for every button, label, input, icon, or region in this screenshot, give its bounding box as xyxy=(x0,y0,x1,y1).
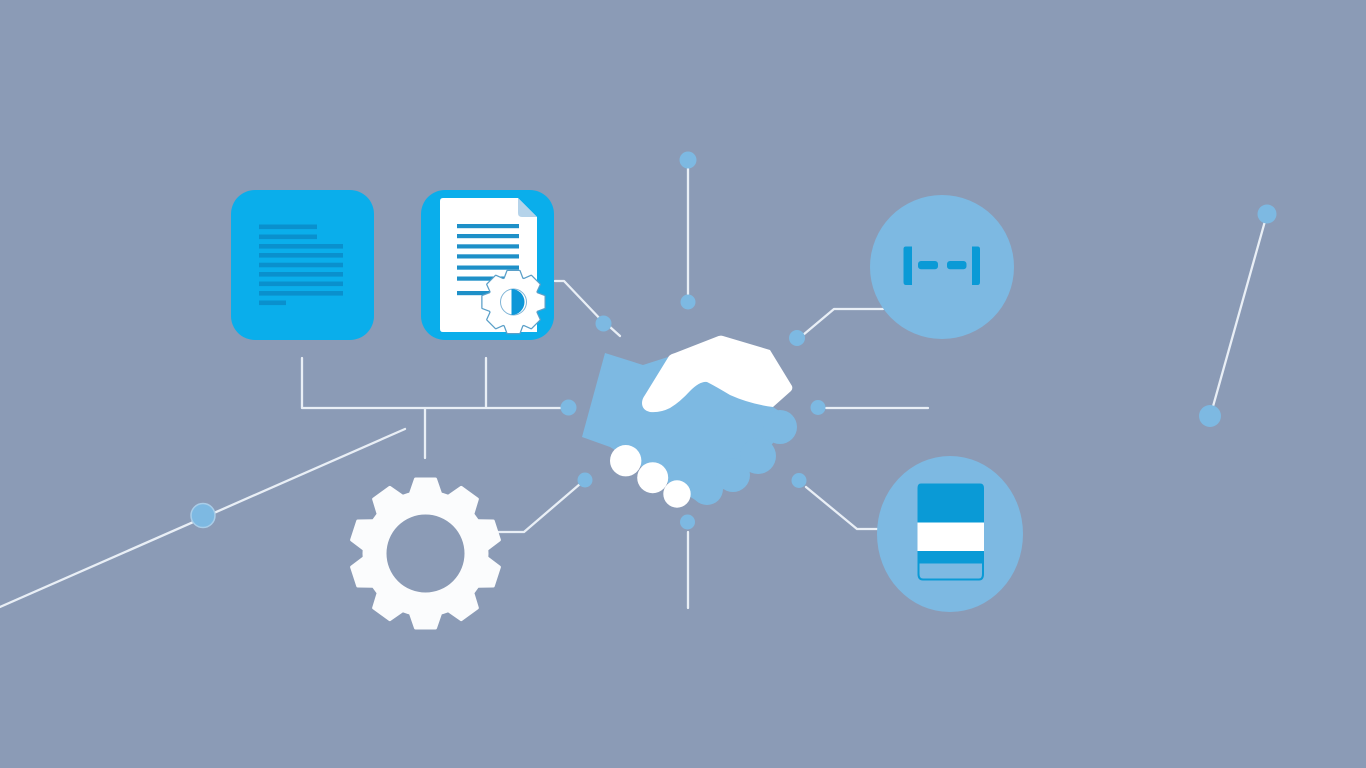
panel: document settings card xyxy=(421,190,554,340)
icon: page fold xyxy=(518,198,537,217)
white hand xyxy=(642,336,792,412)
icon: paper sheet xyxy=(440,198,537,332)
connector nodes xyxy=(191,152,1276,530)
icon: large gear xyxy=(350,479,501,628)
panel: document card xyxy=(231,190,374,340)
knuckle circles xyxy=(610,445,691,508)
icon: text lines xyxy=(259,224,343,305)
panel: bracket circle xyxy=(870,195,1014,339)
icon: document lines xyxy=(457,224,519,295)
icon: small gear xyxy=(482,271,544,333)
icon: handshake xyxy=(582,336,797,508)
icon: bracket xyxy=(904,246,980,285)
icon: stacked card xyxy=(918,484,984,580)
panel: card circle xyxy=(877,456,1023,612)
blue hand xyxy=(582,353,797,505)
